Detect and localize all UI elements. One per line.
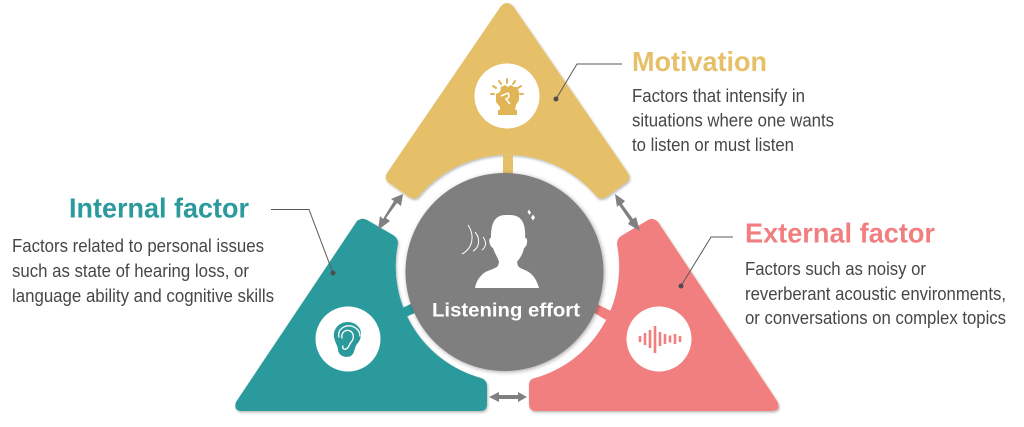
text: external factor description: or conversations on complex topics	[745, 308, 1006, 328]
heading: external factor: External factor	[745, 218, 935, 248]
text: motivation description: situations where one wants	[632, 110, 834, 130]
text: external factor description: reverberant acoustic environments,	[745, 284, 1006, 304]
text: motivation description	[632, 86, 834, 155]
icon: ear	[316, 306, 380, 372]
text: internal factor description: such as state of hearing loss, or	[12, 261, 249, 281]
text: external factor description	[745, 259, 1006, 328]
icon: sound wave	[626, 306, 692, 372]
text: internal factor description: Factors related to personal issues	[12, 236, 264, 256]
callout: motivation	[554, 46, 834, 155]
icon: listening head	[462, 210, 539, 288]
callout: internal factor	[12, 192, 336, 306]
text: internal factor description: language ability and cognitive skills	[12, 286, 274, 306]
text: motivation description: Factors that intensify in	[632, 86, 805, 106]
heading: motivation: Motivation	[632, 46, 767, 77]
heading: internal factor: Internal factor	[69, 192, 249, 224]
arrow: internal to external	[489, 392, 527, 402]
text: external factor description: Factors such as noisy or	[745, 259, 926, 279]
text: motivation description: to listen or must listen	[632, 135, 794, 155]
arrow: motivation to internal	[378, 194, 403, 230]
panel: internal factor triangle	[235, 219, 487, 411]
text: internal factor description	[12, 236, 274, 306]
callout: external factor	[678, 218, 1006, 328]
icon: raised fist	[474, 64, 540, 128]
panel: motivation triangle	[386, 3, 629, 198]
arrow: motivation to external	[615, 194, 640, 231]
panel: listening effort circle	[406, 173, 604, 371]
panel: external factor triangle	[529, 219, 779, 411]
circle label: Listening effort	[432, 300, 581, 322]
